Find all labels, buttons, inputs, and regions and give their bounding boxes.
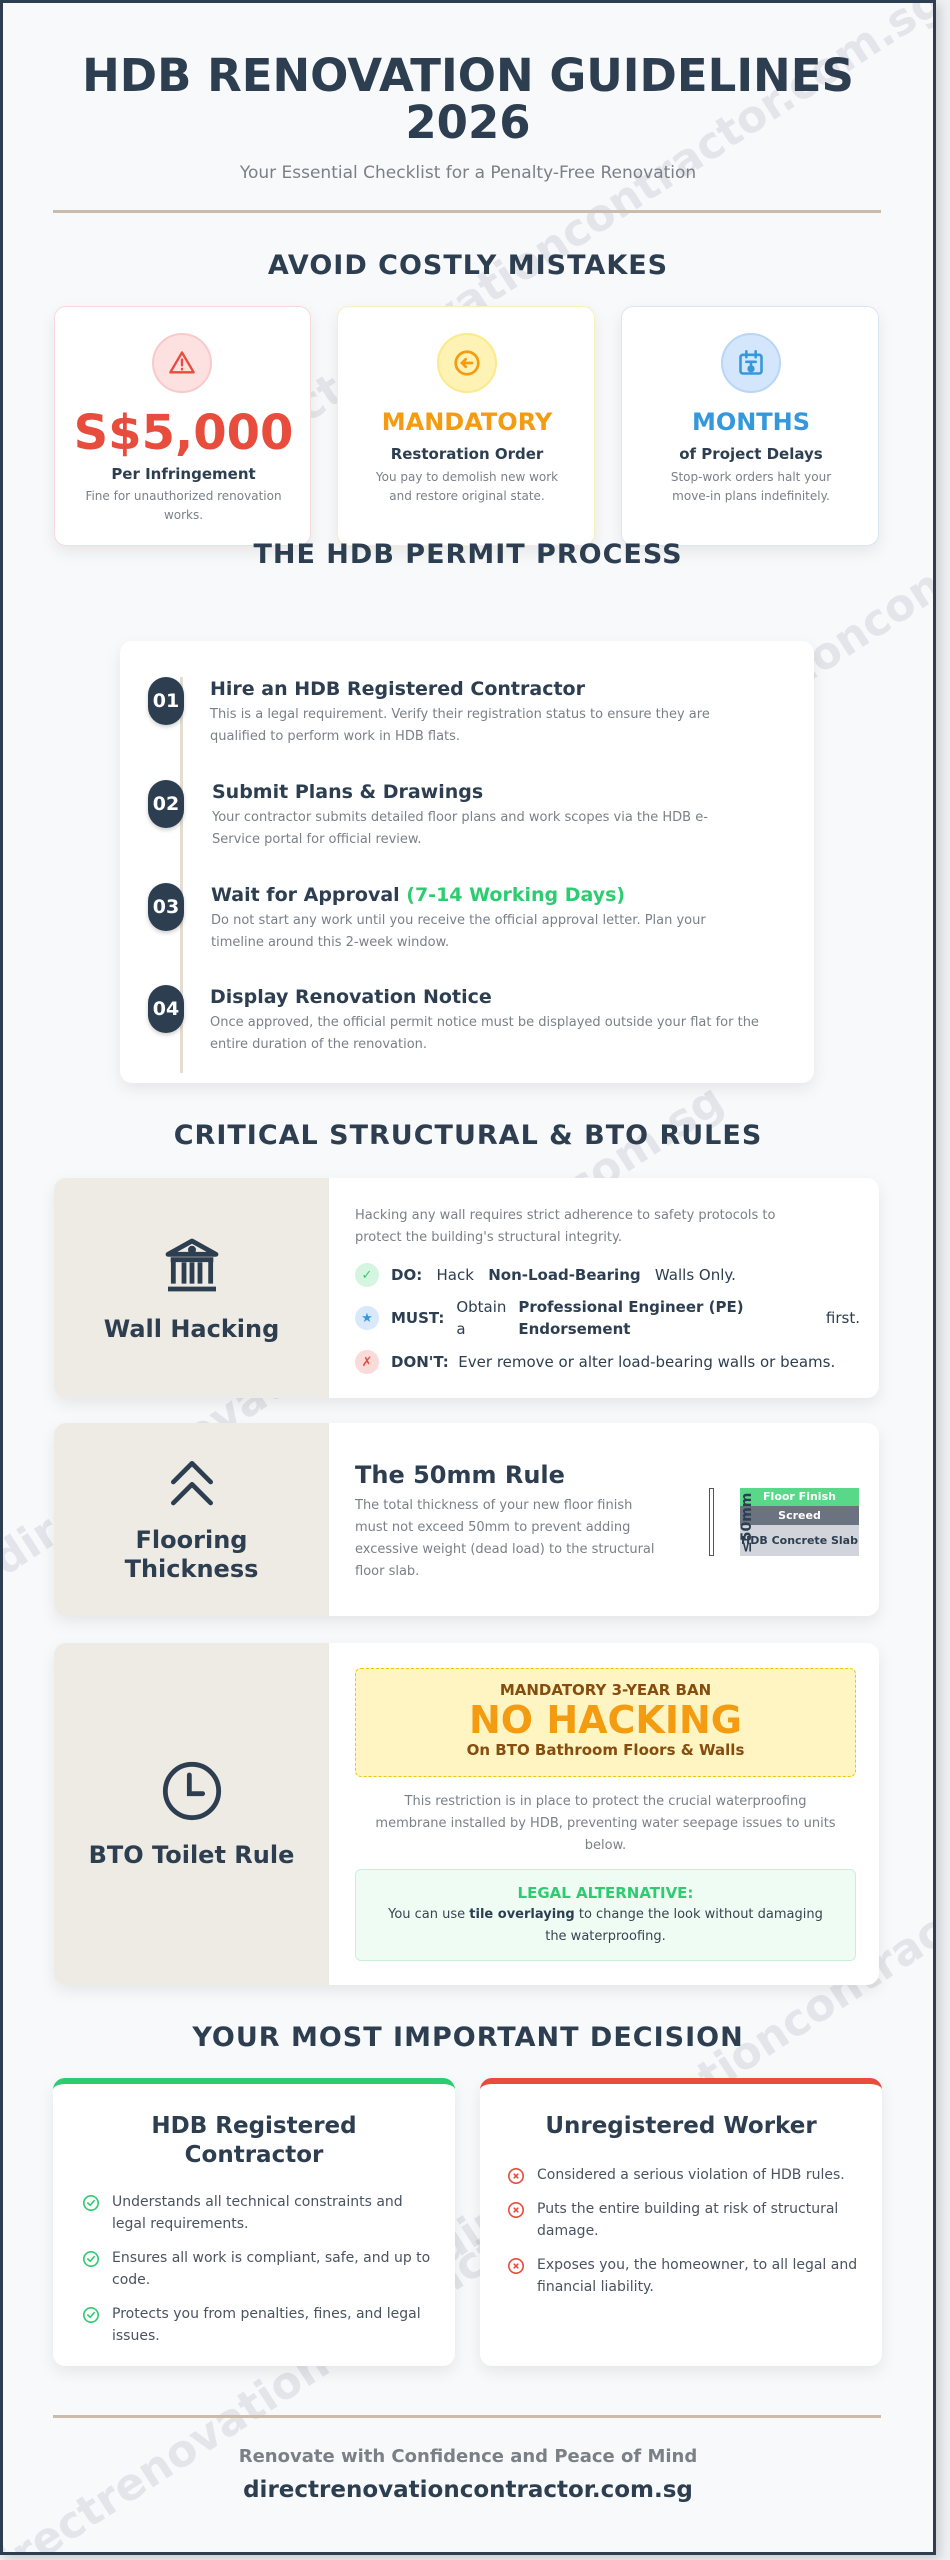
diagram: floor layers: Floor Finish (763, 1490, 836, 1503)
heading: decision: YOUR MOST IMPORTANT DECISION (192, 2022, 744, 2053)
icon: building (166, 1238, 218, 1292)
card: delays: Stop-work orders halt your move-in plans indefinitely. (671, 470, 831, 503)
heading: avoid costly mistakes: AVOID COSTLY MISTAKES (268, 250, 668, 281)
panel: registered contractor: HDB Registered (151, 2113, 357, 2139)
callout: no hacking: MANDATORY 3-YEAR BAN (500, 1681, 711, 1699)
callout: legal alternative: LEGAL ALTERNATIVE: (518, 1884, 693, 1902)
MUST row: Obtain a (456, 1298, 506, 1338)
panel: BTO toilet rule: BTO Toilet Rule (89, 1840, 294, 1868)
panel: permit steps: 01 (153, 690, 179, 712)
MUST row (355, 1298, 860, 1338)
card: fine: Fine for unauthorized renovation works. (85, 489, 282, 522)
MUST row: first. (826, 1309, 860, 1327)
diagram: floor layers: HDB Concrete Slab (741, 1534, 858, 1547)
panel: flooring thickness: The 50mm Rule (355, 1461, 565, 1489)
panel: permit steps: 02 (153, 793, 179, 815)
card: restoration: You pay to demolish new work and restore original state. (376, 470, 558, 503)
step 1 (146, 677, 710, 744)
title: 2026 (405, 96, 531, 149)
panel: registered contractor: Contractor (185, 2142, 323, 2168)
panel: unregistered worker: Puts the entire building at risk of structural damage. (537, 2201, 838, 2239)
panel: registered contractor: Protects you from penalties, fines, and legal issues. (112, 2306, 421, 2344)
footer url: directrenovationcontractor.com.sg (243, 2477, 693, 2503)
step 4 (146, 985, 759, 1052)
step 1: Hire an HDB Registered Contractor (210, 678, 585, 700)
DON'T row: DON'T: (391, 1353, 449, 1371)
DO row: Hack Walls Only. (436, 1266, 736, 1284)
DON'T row: ✗ (362, 1354, 372, 1370)
step 2 (146, 780, 708, 847)
panel: wall hacking (54, 1178, 879, 1398)
diagram: floor layers (709, 1488, 859, 1556)
MUST row: ★ (361, 1310, 373, 1326)
step 4: Display Renovation Notice (210, 986, 492, 1008)
step 1: This is a legal requirement. Verify their registration status to ensure they are qualified to perform work in HDB flats. (210, 707, 710, 744)
panel: unregistered worker: Exposes you, the homeowner, to all legal and financial liability. (537, 2257, 857, 2295)
title (82, 49, 854, 149)
card: delays: of Project Delays (679, 445, 823, 463)
panel: permit steps: 04 (153, 998, 179, 1020)
footer tagline: Renovate with Confidence and Peace of Mind (239, 2446, 697, 2467)
panel: wall hacking: Hacking any wall requires strict adherence to safety protocols to protect the building's structural integrity. (355, 1208, 775, 1245)
diagram: floor layers: ≤50mm (739, 1493, 755, 1553)
panel: flooring thickness: The total thickness of your new floor finish must not exceed 50mm to prevent adding excessive weight (dead load) to the structural floor slab. (355, 1498, 654, 1579)
card: fine (54, 306, 311, 546)
panel: registered contractor: Ensures all work is compliant, safe, and up to code. (112, 2250, 430, 2288)
callout: legal alternative (355, 1869, 856, 1961)
panel: wall hacking: Wall Hacking (104, 1314, 279, 1342)
card: restoration (337, 306, 595, 546)
callout: legal alternative: You can use tile overlaying to change the look without damaging the waterproofing. (388, 1907, 823, 1944)
DO row: ✓ (362, 1268, 372, 1282)
step 3 (146, 883, 706, 950)
icon: warning (152, 333, 212, 393)
step 3: Do not start any work until you receive the official approval letter. Plan your timeline around this 2-week window. (211, 913, 706, 950)
heading: critical rules: CRITICAL STRUCTURAL & BTO RULES (174, 1120, 762, 1151)
DON'T row: Ever remove or alter load-bearing walls or beams. (458, 1353, 835, 1371)
DON'T row (355, 1350, 835, 1374)
icon: back arrow (437, 333, 497, 393)
DO row: Non-Load-Bearing (488, 1266, 641, 1284)
card: fine: S$5,000 (74, 405, 293, 461)
panel: BTO toilet rule: This restriction is in place to protect the crucial waterproofing membrane installed by HDB, preventing water seepage issues to units below. (375, 1794, 836, 1853)
card: restoration: Restoration Order (391, 445, 543, 463)
panel: flooring thickness: Flooring (136, 1526, 247, 1554)
panel: unregistered worker: Unregistered Worker (545, 2113, 817, 2139)
panel: unregistered worker: Considered a serious violation of HDB rules. (537, 2167, 845, 2183)
callout: no hacking: On BTO Bathroom Floors & Walls (467, 1741, 744, 1759)
step 3: Wait for Approval (7-14 Working Days) (211, 884, 625, 906)
panel: permit steps (120, 641, 814, 1083)
icon: double chevron (171, 1461, 213, 1506)
watermark: directrenovationcontractor.com.sg (0, 1074, 732, 1586)
subtitle: Your Essential Checklist for a Penalty-Free Renovation (240, 163, 696, 183)
callout: no hacking: NO HACKING (469, 1698, 742, 1742)
icon: clock (162, 1762, 222, 1820)
panel: BTO toilet rule (54, 1643, 879, 1985)
card: restoration: MANDATORY (382, 408, 552, 436)
step 2: Your contractor submits detailed floor plans and work scopes via the HDB e-Service portal for official review. (212, 810, 708, 847)
heading: permit process: THE HDB PERMIT PROCESS (253, 539, 683, 570)
step 4: Once approved, the official permit notice must be displayed outside your flat for the entire duration of the renovation. (210, 1015, 759, 1052)
callout: no hacking (355, 1668, 856, 1777)
title: HDB RENOVATION GUIDELINES (82, 49, 854, 102)
panel: flooring thickness: Thickness (125, 1554, 258, 1582)
DO row: DO: (391, 1266, 422, 1284)
icon: calendar (721, 333, 781, 393)
MUST row: MUST: (391, 1309, 444, 1327)
panel: permit steps: 03 (153, 896, 179, 918)
diagram: floor layers: Screed (778, 1509, 821, 1522)
panel: flooring thickness (54, 1423, 879, 1616)
card: fine: Per Infringement (111, 465, 256, 483)
DO row (355, 1263, 736, 1287)
card: delays: MONTHS (692, 408, 810, 436)
panel: registered contractor: Understands all technical constraints and legal requirements. (112, 2194, 403, 2232)
card: delays (621, 306, 879, 546)
panel: registered contractor (53, 2078, 455, 2366)
MUST row: Professional Engineer (PE) Endorsement (518, 1298, 744, 1338)
panel: unregistered worker (480, 2078, 882, 2366)
step 2: Submit Plans & Drawings (212, 781, 483, 803)
